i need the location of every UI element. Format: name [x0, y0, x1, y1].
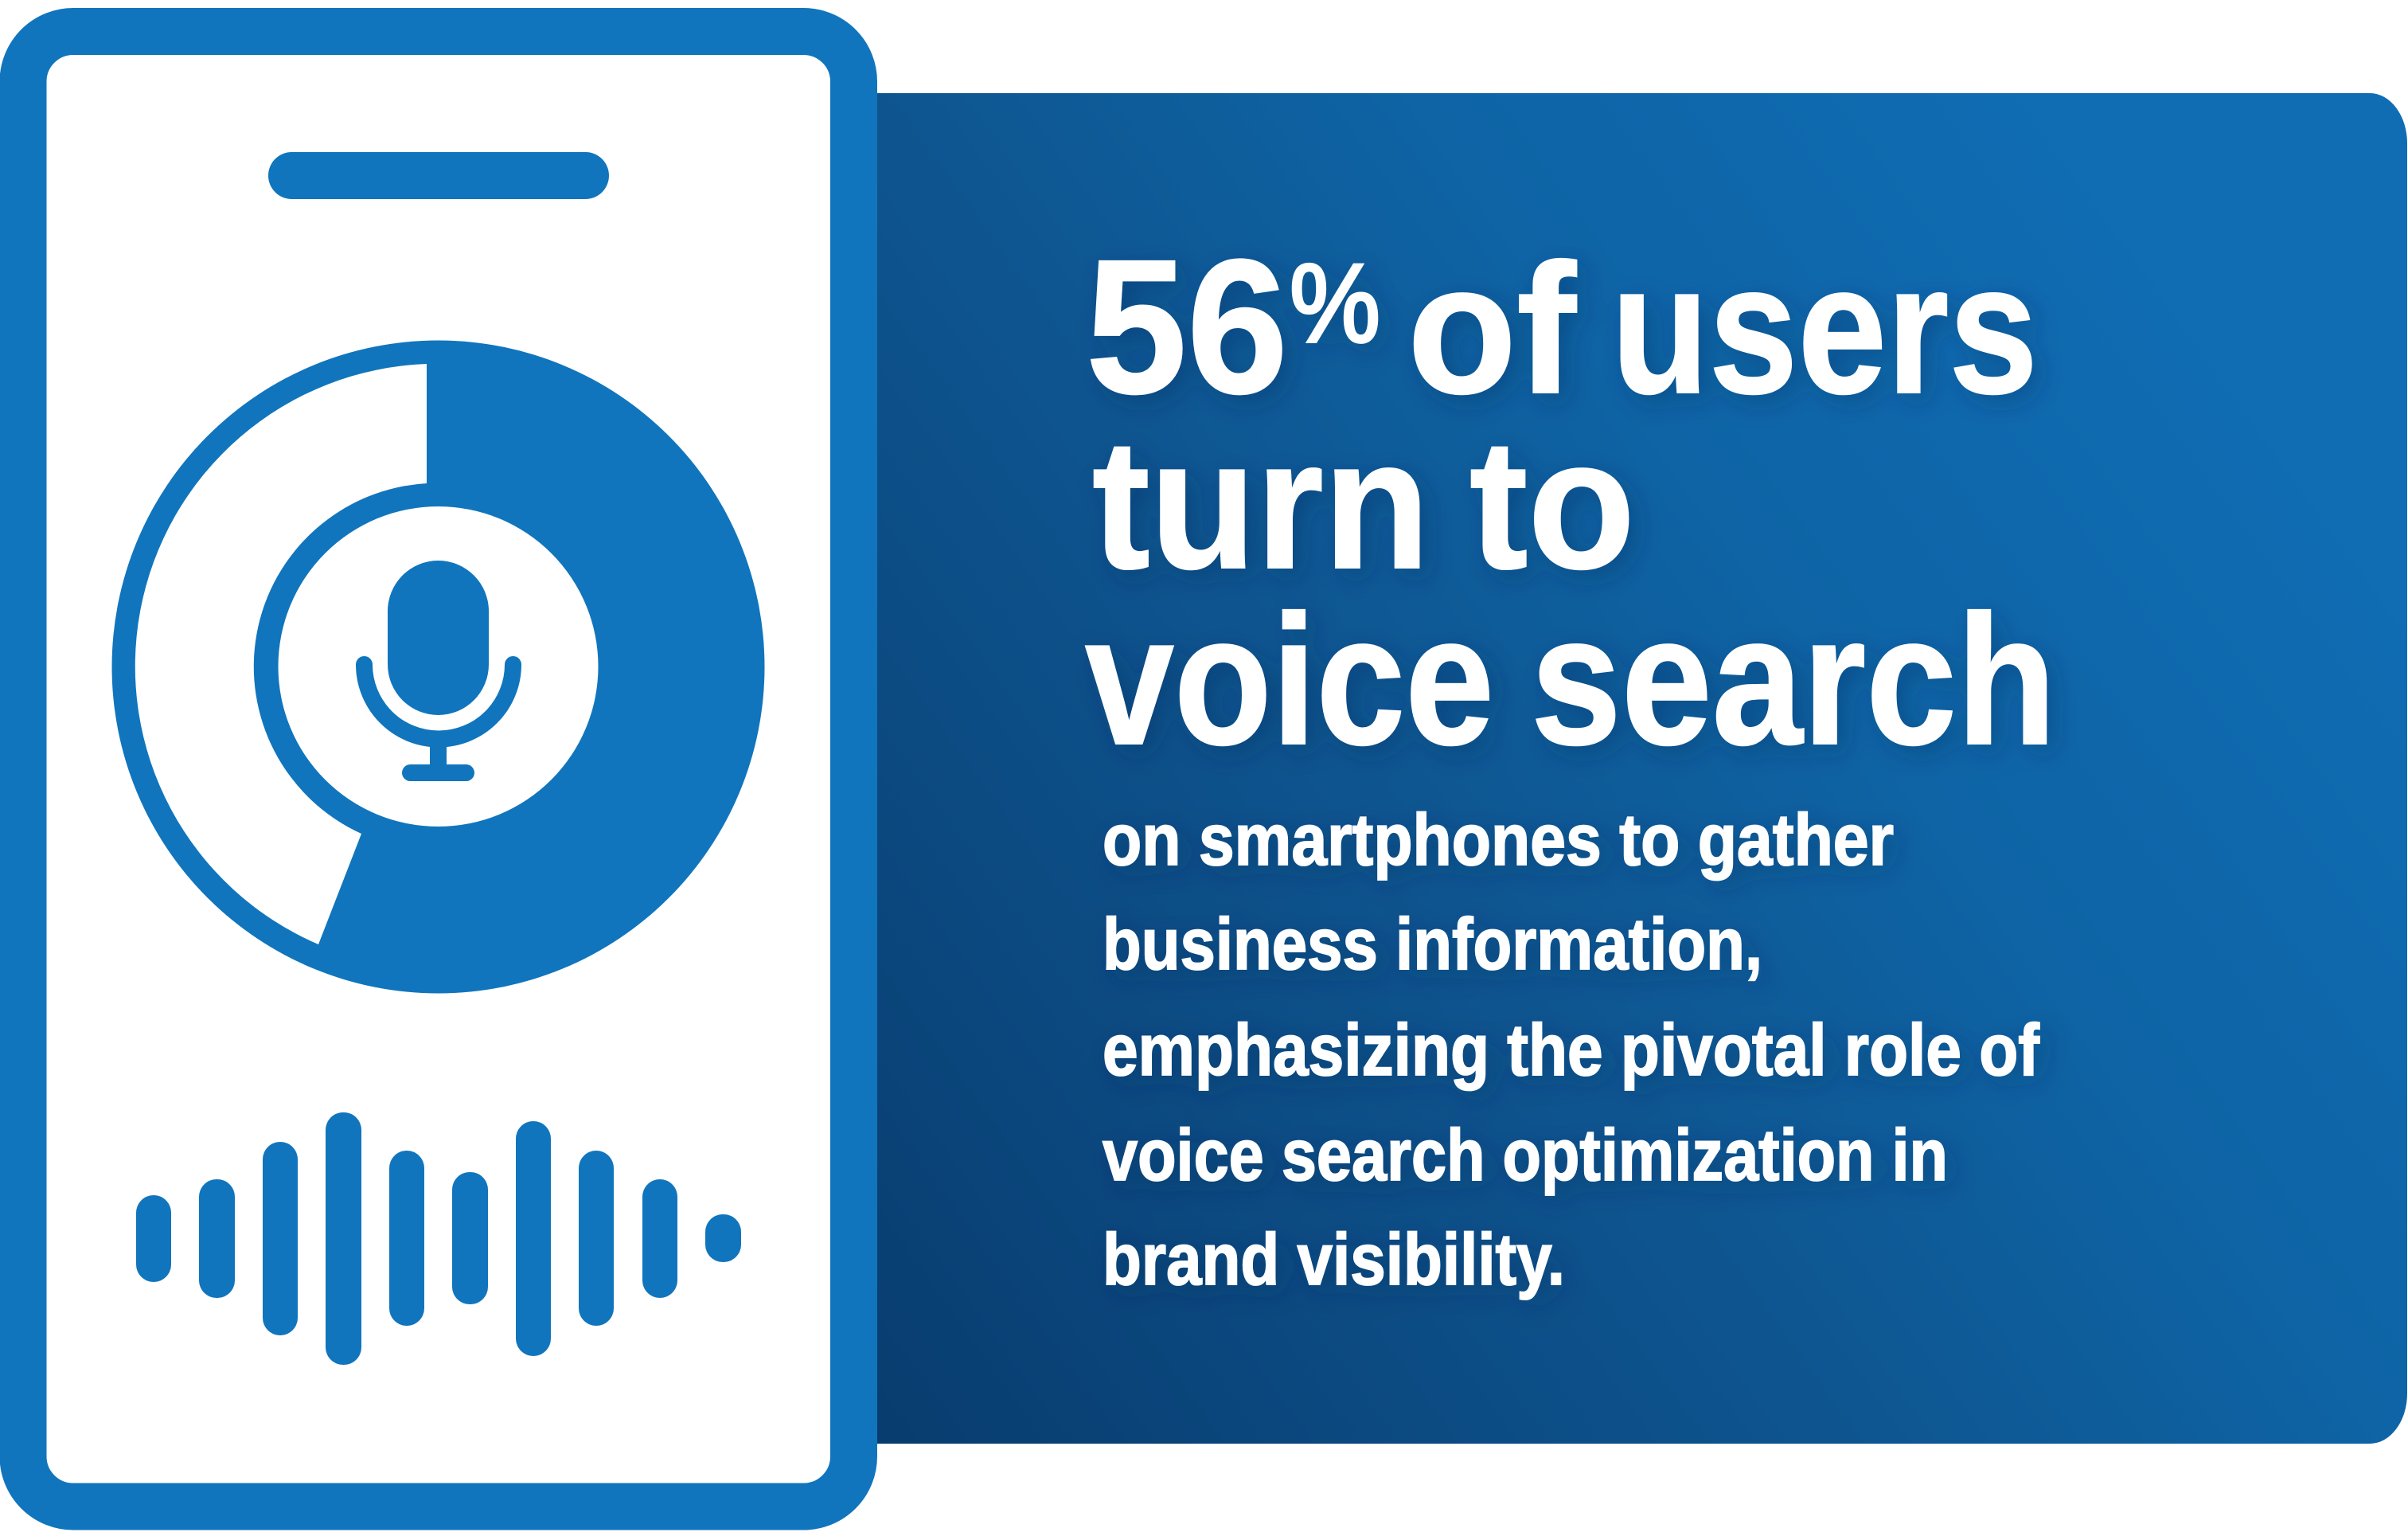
icon: microphone — [365, 561, 513, 781]
panel: blue gradient background — [877, 93, 2407, 1444]
heading: 56% of users turn to voice search: search — [1531, 577, 2056, 784]
body text: supporting statement: voice search optimization in — [1103, 1115, 1948, 1196]
heading: 56% of users turn to voice search — [1085, 220, 2056, 784]
heading: 56% of users turn to voice search: to — [1469, 401, 1635, 608]
body text: supporting statement — [1103, 799, 2039, 1300]
body text: supporting statement: brand visibility. — [1103, 1219, 1565, 1300]
icon: sound wave bars — [136, 1112, 741, 1365]
body text: supporting statement: on smartphones to gather — [1103, 799, 1894, 881]
heading: 56% of users turn to voice search: of — [1407, 226, 1577, 432]
body text: supporting statement: business information, — [1103, 904, 1762, 985]
phone speaker — [268, 152, 609, 199]
phone body — [23, 32, 853, 1507]
heading: 56% of users turn to voice search: 56 — [1086, 220, 1288, 433]
phone illustration — [23, 32, 853, 1507]
body text: supporting statement: emphasizing the pivotal role of — [1103, 1010, 2039, 1091]
heading: 56% of users turn to voice search: turn — [1092, 401, 1430, 608]
donut chart: 56 percent — [111, 341, 764, 994]
heading: 56% of users turn to voice search: % — [1290, 240, 1380, 365]
heading: 56% of users turn to voice search: voice — [1085, 577, 1494, 784]
heading: 56% of users turn to voice search: users — [1611, 226, 2038, 432]
